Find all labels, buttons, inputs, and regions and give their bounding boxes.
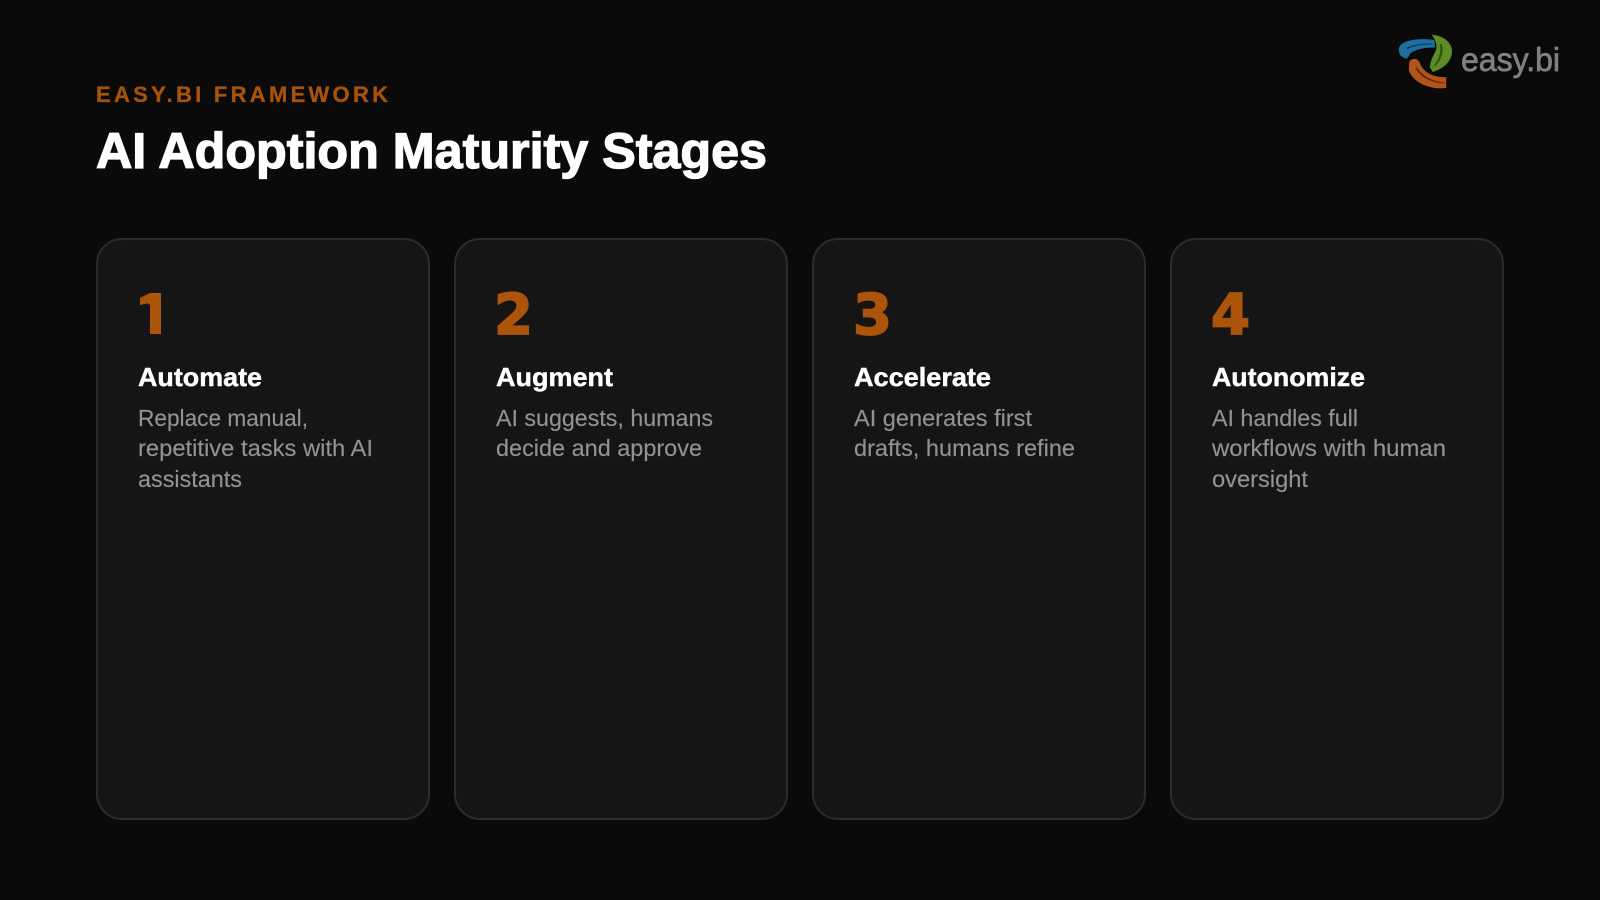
stage number 3: 3 — [853, 283, 892, 348]
stage heading: Automate — [138, 362, 262, 392]
stage description: drafts, humans refine — [854, 435, 1075, 461]
panel: stage 4 Autonomize — [1171, 239, 1503, 819]
stage number 1: 1 — [135, 283, 174, 348]
stage description: AI generates first — [854, 405, 1033, 431]
stage description: workflows with human — [1211, 435, 1446, 461]
stage heading: Autonomize — [1212, 362, 1365, 392]
stage number 4: 4 — [1211, 283, 1250, 348]
stage description — [138, 405, 373, 492]
stage heading: Augment — [496, 362, 613, 392]
title: AI Adoption Maturity Stages — [96, 123, 767, 179]
icon: logo mark — [1400, 36, 1451, 87]
stage description — [496, 405, 713, 461]
panel: stage 1 Automate — [97, 239, 429, 819]
logo wordmark: easy.bi — [1461, 41, 1560, 78]
stage description: assistants — [138, 466, 242, 492]
logo: easy.bi — [1400, 36, 1560, 87]
panel: stage 3 Accelerate — [813, 239, 1145, 819]
stage description: Replace manual, — [138, 405, 308, 431]
stage description — [1211, 405, 1446, 492]
panel: stage 2 Augment — [455, 239, 787, 819]
stage description: AI suggests, humans — [496, 405, 713, 431]
stage description: decide and approve — [496, 435, 702, 461]
stage heading: Accelerate — [854, 362, 991, 392]
stage description: oversight — [1212, 466, 1309, 492]
stage description: AI handles full — [1212, 405, 1358, 431]
stage number 2: 2 — [494, 283, 533, 348]
eyebrow: EASY.BI FRAMEWORK — [96, 82, 388, 107]
stage description: repetitive tasks with AI — [138, 435, 373, 461]
stage description — [854, 405, 1075, 461]
